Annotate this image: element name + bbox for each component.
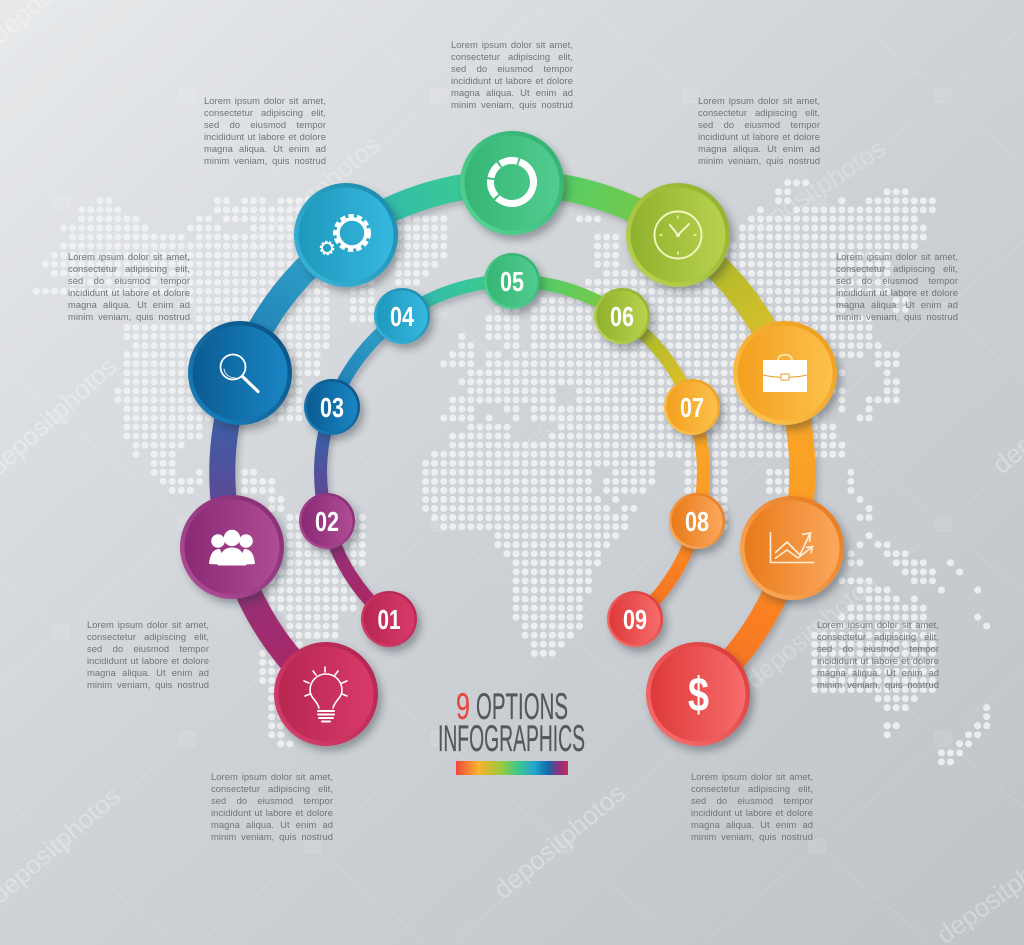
text block: bottom right: magna aliqua. Ut enim ad	[691, 819, 813, 830]
text block: lower left	[87, 619, 209, 690]
text block: bottom left: incididunt ut labore et dolore	[211, 807, 333, 818]
option 3: search node	[188, 321, 292, 425]
text block: upper right: sed do eiusmod tempor	[698, 119, 820, 130]
icon: segmented donut	[484, 154, 540, 210]
number 06	[594, 288, 650, 344]
outer ring band	[222, 183, 802, 694]
watermark: depositphotos	[485, 356, 628, 483]
inner ring band	[321, 281, 703, 619]
number 01: 01	[378, 604, 400, 635]
text block: middle right: consectetur adipiscing elit,	[836, 263, 958, 274]
watermark: depositphotos	[243, 130, 386, 257]
icon: people	[209, 530, 255, 566]
text block: upper right: magna aliqua. Ut enim ad	[698, 143, 820, 154]
text block: top centre: incididunt ut labore et dolore	[451, 75, 573, 86]
text block: top centre	[451, 39, 573, 110]
text block: bottom right: sed do eiusmod tempor	[691, 795, 813, 806]
text block: middle left: magna aliqua. Ut enim ad	[68, 299, 190, 310]
number 05: 05	[500, 266, 524, 297]
text block: middle right: incididunt ut labore et dolore	[836, 287, 958, 298]
option 6: clock node	[626, 183, 730, 287]
icon: magnifier	[220, 354, 258, 392]
number 04: 04	[390, 301, 414, 332]
text block: lower left: minim veniam, quis nostrud	[87, 679, 209, 690]
watermark: depositphotos	[739, 133, 891, 246]
text block: top centre: minim veniam, quis nostrud	[451, 99, 573, 110]
text block: lower left: magna aliqua. Ut enim ad	[87, 667, 209, 678]
text block: middle right: Lorem ipsum dolor sit amet,	[836, 251, 958, 262]
text block: middle left: sed do eiusmod tempor	[68, 275, 190, 286]
number 09	[607, 591, 663, 647]
icon: gears	[321, 216, 369, 254]
dotted world map	[36, 183, 988, 762]
text block: middle left	[68, 251, 190, 322]
text block: bottom right: consectetur adipiscing elit,	[691, 783, 813, 794]
text block: top centre: magna aliqua. Ut enim ad	[451, 87, 573, 98]
text block: lower left: Lorem ipsum dolor sit amet,	[87, 619, 209, 630]
text block: upper right: consectetur adipiscing elit,	[698, 107, 820, 118]
text block: bottom left: Lorem ipsum dolor sit amet,	[211, 771, 333, 782]
text block: bottom left: magna aliqua. Ut enim ad	[211, 819, 333, 830]
map: north america	[36, 201, 445, 509]
icon: light bulb	[304, 667, 347, 722]
text block: lower right: incididunt ut labore et dolore	[817, 655, 939, 666]
option 1: bulb node	[274, 642, 378, 746]
text block: lower left: consectetur adipiscing elit,	[87, 631, 209, 642]
number 05	[484, 253, 540, 309]
text block: bottom right: incididunt ut labore et dolore	[691, 807, 813, 818]
icon: dollar: $	[688, 669, 709, 722]
rainbow bar	[456, 761, 568, 775]
map: eurasia and africa	[426, 183, 933, 653]
text block: middle right	[836, 251, 958, 322]
text block: upper left: minim veniam, quis nostrud	[204, 155, 326, 166]
number 07	[664, 379, 720, 435]
text block: upper left: consectetur adipiscing elit,	[204, 107, 326, 118]
title: INFOGRAPHICS	[438, 718, 585, 759]
title: OPTIONS	[476, 686, 568, 727]
text block: upper left: sed do eiusmod tempor	[204, 119, 326, 130]
text block: lower right: magna aliqua. Ut enim ad	[817, 667, 939, 678]
text block: middle left: incididunt ut labore et dolore	[68, 287, 190, 298]
number 07: 07	[680, 392, 704, 423]
text block: bottom right	[691, 771, 813, 842]
text block: upper right	[698, 95, 820, 166]
text block: top centre: sed do eiusmod tempor	[451, 63, 573, 74]
watermark: depositphotos	[740, 568, 883, 695]
title: 9	[456, 686, 470, 727]
map: south america	[263, 518, 363, 744]
text block: lower right: Lorem ipsum dolor sit amet,	[817, 619, 939, 630]
text block: lower right	[817, 619, 939, 690]
text block: middle left: minim veniam, quis nostrud	[68, 311, 190, 322]
number 08	[669, 493, 725, 549]
option 4: gears node	[294, 183, 398, 287]
text block: lower right: minim veniam, quis nostrud	[817, 679, 939, 690]
number 06: 06	[610, 301, 634, 332]
number 04	[374, 288, 430, 344]
option 7: briefcase node	[733, 321, 837, 425]
text block: upper right: incididunt ut labore et dolore	[698, 131, 820, 142]
number 08: 08	[685, 506, 709, 537]
option 9: dollar node	[646, 642, 750, 746]
text block: top centre: Lorem ipsum dolor sit amet,	[451, 39, 573, 50]
option 5: donut node	[460, 131, 564, 235]
text block: upper left: magna aliqua. Ut enim ad	[204, 143, 326, 154]
text block: bottom right: Lorem ipsum dolor sit amet,	[691, 771, 813, 782]
text block: lower right: consectetur adipiscing elit,	[817, 631, 939, 642]
icon: clock	[654, 212, 702, 258]
text block: bottom left	[211, 771, 333, 842]
text block: bottom left: consectetur adipiscing elit,	[211, 783, 333, 794]
text block: bottom left: sed do eiusmod tempor	[211, 795, 333, 806]
text block: upper right: minim veniam, quis nostrud	[698, 155, 820, 166]
option 8: chart node	[740, 496, 844, 600]
number 09: 09	[623, 604, 647, 635]
text block: upper left: Lorem ipsum dolor sit amet,	[204, 95, 326, 106]
text block: middle right: sed do eiusmod tempor	[836, 275, 958, 286]
map: south-east asia, australia, oceania	[815, 472, 988, 762]
text block: middle right: minim veniam, quis nostrud	[836, 311, 958, 322]
text block: upper right: Lorem ipsum dolor sit amet,	[698, 95, 820, 106]
icon: line chart	[770, 532, 814, 562]
text block: lower left: incididunt ut labore et dolore	[87, 655, 209, 666]
title	[438, 686, 585, 759]
text block: lower left: sed do eiusmod tempor	[87, 643, 209, 654]
text block: middle left: Lorem ipsum dolor sit amet,	[68, 251, 190, 262]
text block: bottom left: minim veniam, quis nostrud	[211, 831, 333, 842]
watermark: depositphotos	[488, 778, 631, 905]
text block: middle left: consectetur adipiscing elit,	[68, 263, 190, 274]
number 02	[299, 493, 355, 549]
text block: top centre: consectetur adipiscing elit,	[451, 51, 573, 62]
number 03	[304, 379, 360, 435]
icon: briefcase	[763, 355, 807, 392]
text block: upper left: incididunt ut labore et dolore	[204, 131, 326, 142]
text block: middle right: magna aliqua. Ut enim ad	[836, 299, 958, 310]
number 01	[361, 591, 417, 647]
option 2: people node	[180, 495, 284, 599]
number 02: 02	[315, 506, 339, 537]
text block: lower right: sed do eiusmod tempor	[817, 643, 939, 654]
text block: upper left	[204, 95, 326, 166]
number 03: 03	[320, 392, 344, 423]
text block: bottom right: minim veniam, quis nostrud	[691, 831, 813, 842]
